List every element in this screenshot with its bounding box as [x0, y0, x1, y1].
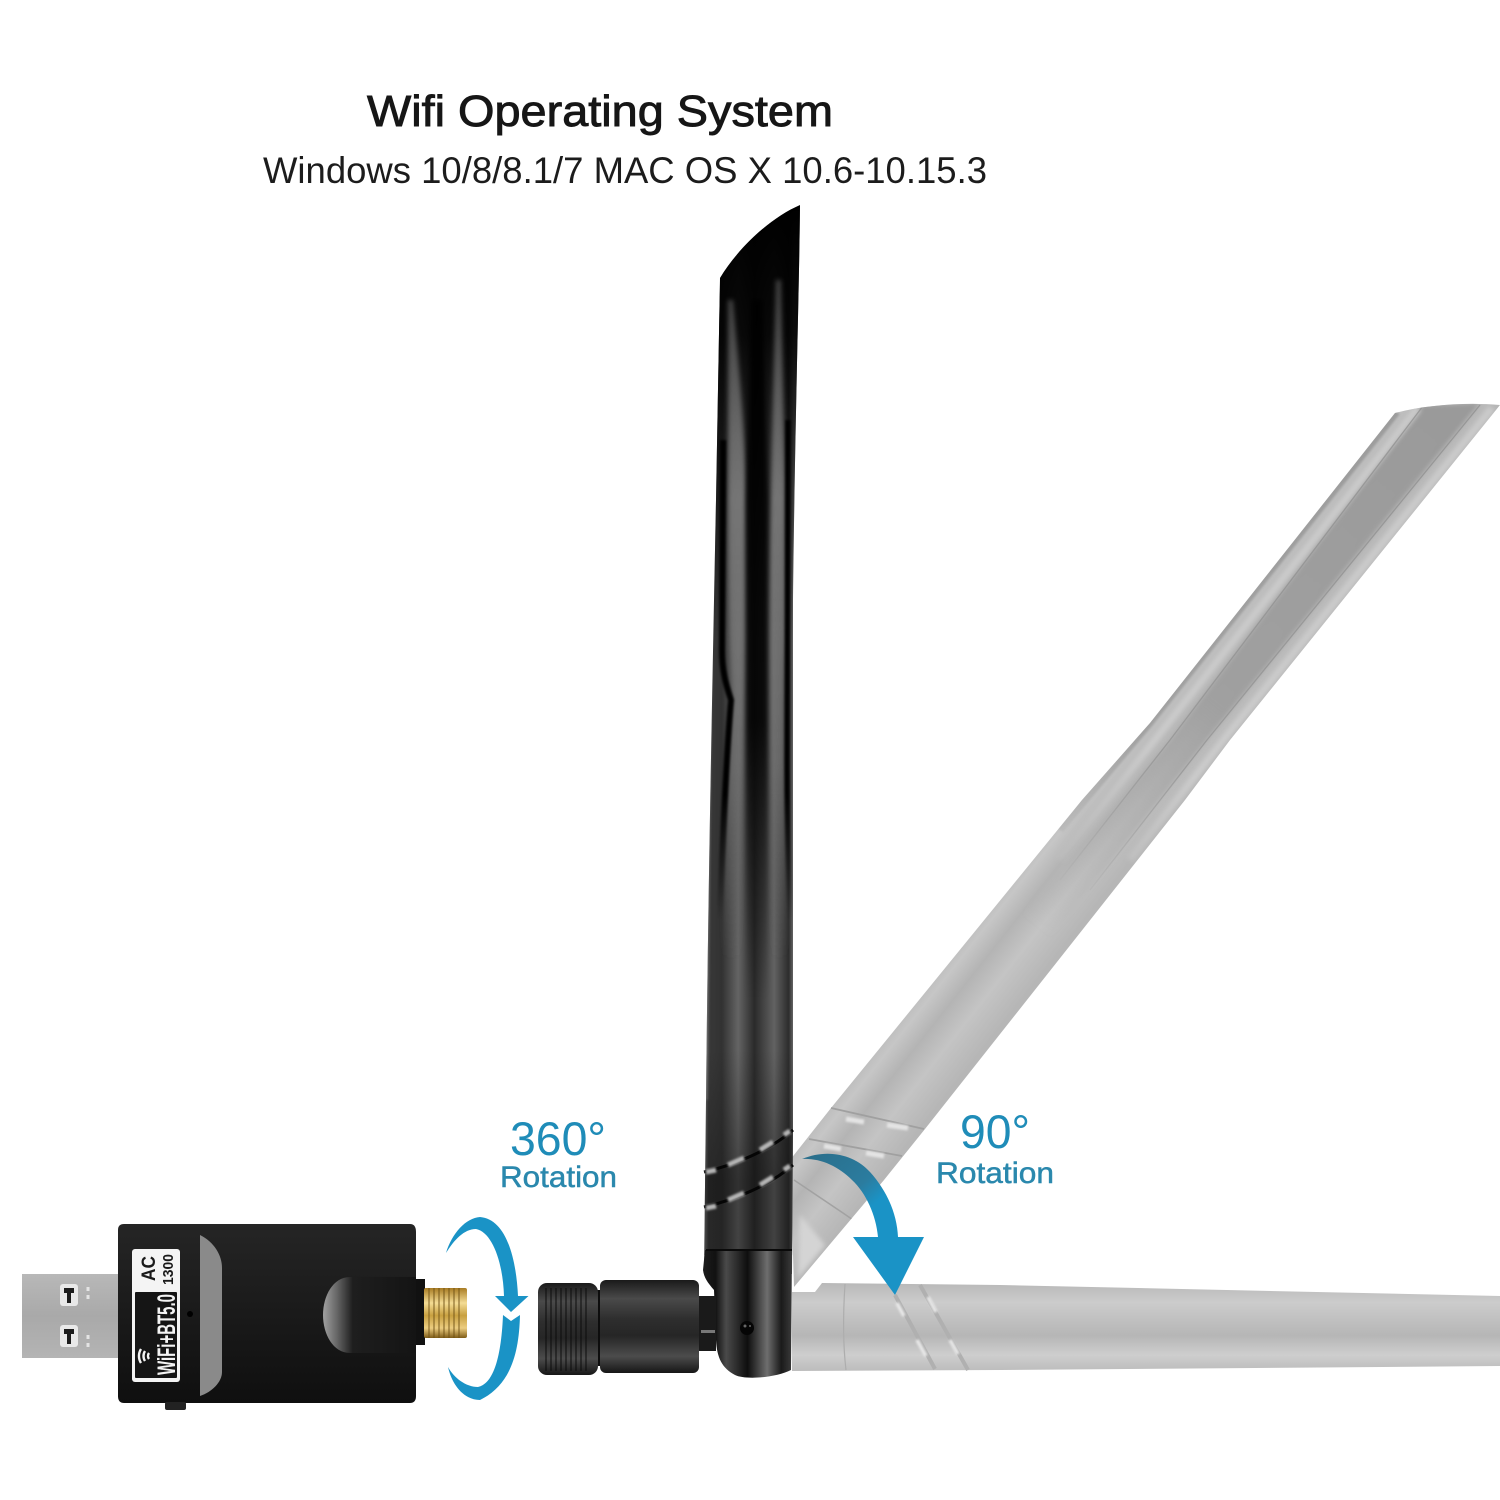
ghost antenna: tilted position	[790, 403, 1500, 1287]
title: Wifi Operating System	[367, 87, 833, 136]
label: Rotation: Rotation	[936, 1157, 1054, 1190]
product label	[132, 1249, 181, 1382]
label: 90 degrees: 90°	[960, 1105, 1030, 1158]
arrow: 360 degree rotation	[446, 1217, 528, 1400]
label text: 1300: 1300	[160, 1254, 177, 1285]
label text: AC: AC	[139, 1256, 160, 1281]
label text: WiFi+BT5.0: WiFi+BT5.0	[153, 1294, 181, 1375]
label: 360 degrees: 360°	[510, 1112, 606, 1165]
SMA connector with knurled nut	[538, 1280, 716, 1375]
icon: pivot screw	[740, 1321, 754, 1335]
arrow: 90 degree rotation	[802, 1154, 924, 1295]
status led	[187, 1311, 193, 1317]
ghost antenna: horizontal position	[792, 1283, 1500, 1371]
mount collar	[416, 1279, 425, 1345]
icon: wifi	[139, 1349, 149, 1363]
label: Rotation: Rotation	[500, 1161, 617, 1194]
USB plug	[22, 1274, 120, 1358]
swivel base of antenna	[703, 1250, 792, 1378]
subtitle: supported operating systems: Windows 10/8/8.1/7 MAC OS X 10.6-10.15.3	[263, 150, 987, 191]
grey wedge	[200, 1235, 222, 1396]
main antenna: upright position	[700, 205, 800, 1274]
USB dongle	[22, 1224, 467, 1410]
gold RP-SMA connector	[424, 1288, 467, 1338]
dongle body	[118, 1224, 416, 1403]
side switch	[165, 1402, 186, 1410]
antenna mount bump	[323, 1277, 416, 1353]
